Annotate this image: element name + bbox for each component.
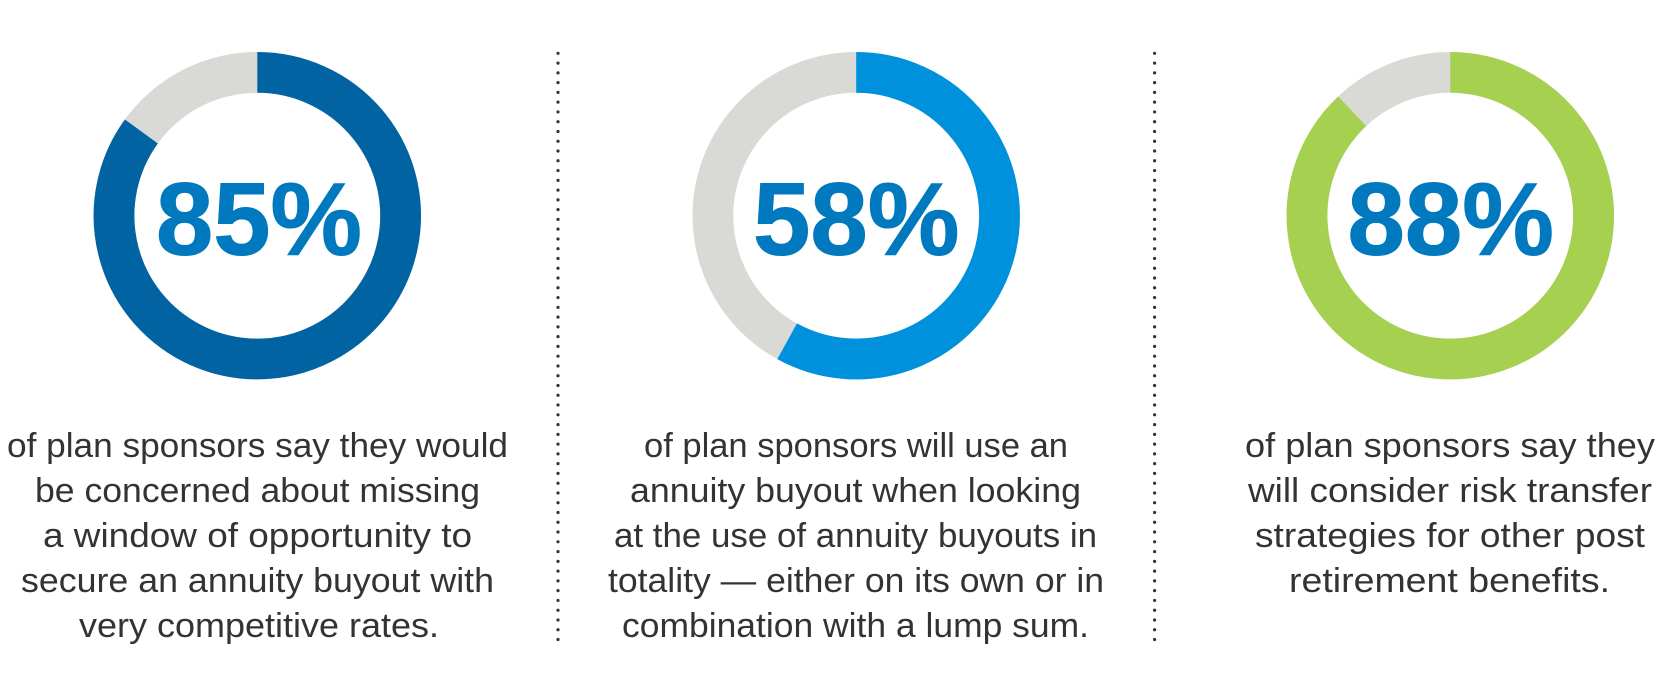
donut chart: 58% [713,72,1000,359]
number: 88%: 88% [1348,162,1554,276]
text block: 58% description [608,427,1104,645]
text block: 58% description: at the use of annuity buyouts in [614,517,1097,555]
donut chart: 85% [114,72,401,359]
text block: 58% description: totality — either on its own or in [608,562,1104,600]
text block: 88% description: strategies for other post [1255,517,1646,555]
text block: 58% description: combination with a lump sum. [622,607,1089,645]
panel: 85% stat [7,72,508,645]
panel: 88% stat [1245,72,1655,600]
text block: 85% description: very competitive rates. [79,607,439,645]
text block: 88% description: of plan sponsors say they [1245,427,1655,465]
text block: 88% description: will consider risk transfer [1247,472,1652,510]
text block: 88% description [1245,427,1655,600]
panel: 58% stat [608,72,1104,645]
text block: 58% description: annuity buyout when looking [630,472,1081,510]
text block: 58% description: of plan sponsors will use an [644,427,1068,465]
number: 85%: 85% [156,162,362,276]
divider: left dotted line [556,53,560,641]
divider: right dotted line [1153,53,1156,641]
text block: 88% description: retirement benefits. [1289,562,1610,600]
text block: 85% description [7,427,508,645]
text block: 85% description: be concerned about missing [35,472,480,510]
number: 58%: 58% [753,162,960,276]
donut chart: 88% [1307,72,1594,359]
text block: 85% description: of plan sponsors say they would [7,427,508,465]
text block: 85% description: a window of opportunity to [43,517,472,555]
text block: 85% description: secure an annuity buyout with [21,562,494,600]
